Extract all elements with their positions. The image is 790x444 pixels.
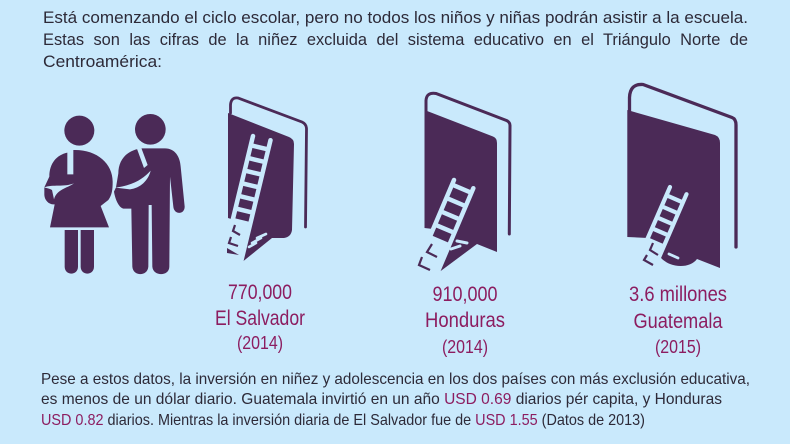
label: Guatemala: (2015) bbox=[655, 337, 701, 357]
label: El Salvador: El Salvador bbox=[215, 307, 305, 330]
icon: book with ladder, Honduras bbox=[418, 93, 510, 273]
investment text: USD 0.82 diarios. Mientras la inversión diaria de El Salvador fue de USD 1.55 (Datos de 2013) bbox=[41, 412, 645, 429]
intro text: Estas son las cifras de la niñez excluida del sistema educativo en el Triángulo Norte de bbox=[43, 30, 748, 49]
label: El Salvador: 770,000 bbox=[228, 281, 292, 304]
label: Honduras: Honduras bbox=[425, 309, 505, 332]
investment text: es menos de un dólar diario. Guatemala invirtió en un año USD 0.69 diarios pér capita, y Honduras bbox=[41, 391, 722, 408]
ladder bbox=[418, 180, 473, 272]
ladder bbox=[224, 136, 270, 261]
label: Honduras: 910,000 bbox=[432, 283, 498, 306]
intro text: Centroamérica: bbox=[43, 52, 162, 71]
label: Honduras bbox=[425, 283, 505, 357]
ladder bbox=[641, 187, 687, 260]
label: El Salvador: (2014) bbox=[237, 333, 283, 353]
label: Guatemala: 3.6 millones bbox=[629, 283, 727, 306]
icon: book with ladder, El Salvador bbox=[224, 98, 306, 263]
label: Guatemala: Guatemala bbox=[634, 310, 723, 333]
intro text bbox=[43, 8, 748, 71]
label: El Salvador bbox=[215, 281, 305, 353]
label: Honduras: (2014) bbox=[442, 337, 488, 357]
label: Guatemala bbox=[629, 283, 727, 357]
icon: woman figure bbox=[44, 116, 113, 274]
icon: book with ladder, Guatemala bbox=[627, 84, 736, 268]
investment text: Pese a estos datos, la inversión en niñez y adolescencia en los dos países con más exclusión educativa, bbox=[41, 371, 750, 388]
investment text bbox=[41, 371, 750, 429]
icon: man figure bbox=[114, 114, 185, 274]
icon: two parents bbox=[44, 114, 185, 274]
intro text: Está comenzando el ciclo escolar, pero no todos los niños y niñas podrán asistir a la escuela. bbox=[43, 8, 748, 27]
